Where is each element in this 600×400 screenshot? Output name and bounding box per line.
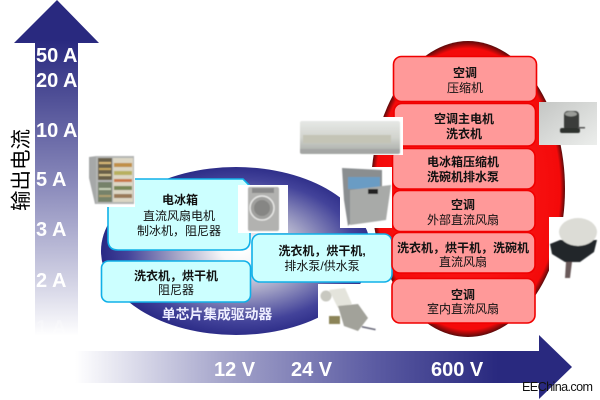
panel: cyan box washer dryer damper — [102, 261, 250, 302]
panel: red box AC outdoor fan: 外部直流风扇 — [427, 212, 499, 227]
icon: dishwasher — [340, 167, 392, 228]
panel: cyan box refrigerator: 电冰箱 — [162, 192, 198, 207]
panel: red box fridge compressor: 电冰箱压缩机 — [427, 154, 499, 169]
icon: washing machine — [238, 185, 288, 233]
panel: red box AC compressor: 压缩机 — [447, 80, 483, 95]
panel: red box AC compressor — [394, 56, 536, 102]
axis labels: current values — [36, 45, 78, 339]
icon: air conditioner — [300, 117, 403, 155]
axis labels: voltage values: 12 V — [214, 359, 256, 381]
axis labels: current values: 50 A — [36, 45, 78, 67]
icon: blower motor — [549, 217, 599, 281]
panel: red box washer dryer dishwasher fan: 直流风扇 — [439, 254, 487, 269]
axis labels: current values: 1 A — [36, 317, 66, 339]
panel: red box AC main motor — [394, 104, 536, 146]
panel: red box washer dryer dishwasher fan — [392, 232, 535, 273]
axis labels: current values: 5 A — [36, 169, 66, 191]
axis labels: voltage values: 24 V — [291, 359, 333, 381]
panel: red box AC main motor: 空调主电机 — [434, 111, 494, 126]
horizontal axis arrow: voltage — [75, 335, 572, 399]
axis labels: current values: 20 A — [36, 70, 78, 92]
panel: red box AC main motor: 洗衣机 — [446, 126, 482, 141]
axis labels: voltage values: 600 V — [431, 359, 484, 381]
panel: cyan box washer dryer pumps: 洗衣机，烘干机, — [278, 243, 366, 258]
axis title: output current: 输出电流 — [10, 129, 33, 211]
caption: 单芯片集成驱动器 — [162, 306, 272, 322]
icon: refrigerator — [89, 155, 135, 207]
panel: red box AC indoor fan — [392, 278, 535, 323]
panel: cyan box washer dryer damper: 洗衣机，烘干机 — [134, 268, 218, 283]
watermark: EEChina.com — [522, 380, 593, 394]
blue ellipse: single-chip integrated driver — [101, 167, 371, 335]
panel: red box AC compressor: 空调 — [453, 65, 477, 80]
panel: red box AC outdoor fan — [392, 190, 535, 232]
panel: cyan box washer dryer damper: 阻尼器 — [158, 283, 194, 297]
panel: cyan box refrigerator — [108, 179, 250, 250]
icon: compressor — [539, 102, 597, 145]
panel: red box fridge compressor — [392, 148, 535, 189]
panel: red box washer dryer dishwasher fan: 洗衣机，烘干机，洗碗机 — [397, 240, 529, 255]
panel: cyan box refrigerator: 制冰机，阻尼器 — [137, 224, 221, 238]
panel: cyan box refrigerator: 直流风扇电机 — [143, 208, 215, 223]
panel: red box AC outdoor fan: 空调 — [451, 197, 475, 212]
icon: drain pump — [318, 284, 378, 334]
panel: red box AC indoor fan: 室内直流风扇 — [427, 301, 499, 316]
axis labels: current values: 10 A — [36, 120, 78, 142]
axis labels: current values: 3 A — [36, 219, 66, 241]
axis labels: voltage values — [214, 359, 484, 381]
panel: cyan box washer dryer pumps — [252, 234, 392, 282]
vertical axis arrow: output current — [14, 0, 99, 339]
axis labels: current values: 2 A — [36, 270, 66, 292]
panel: red box AC indoor fan: 空调 — [451, 287, 475, 302]
panel: red box fridge compressor: 洗碗机排水泵 — [427, 169, 499, 184]
panel: cyan box washer dryer pumps: 排水泵/供水泵 — [284, 259, 360, 273]
red ellipse: high voltage — [371, 41, 565, 337]
